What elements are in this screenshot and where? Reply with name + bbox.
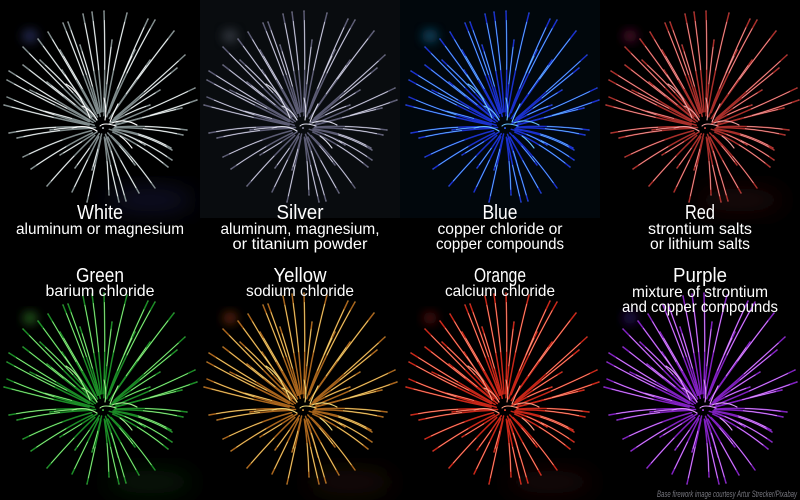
heading: White: White bbox=[77, 202, 123, 224]
text: red compound: or lithium salts bbox=[650, 236, 750, 253]
panel: Silver bbox=[200, 0, 400, 253]
panel: Green bbox=[4, 265, 197, 494]
panel: Orange bbox=[406, 265, 599, 494]
text: purple compound: and copper compounds bbox=[622, 299, 778, 316]
heading: Purple: Purple bbox=[673, 265, 727, 287]
panel: White bbox=[4, 11, 197, 238]
text: yellow compound: sodium chloride bbox=[246, 283, 354, 300]
heading: Silver: Silver bbox=[276, 202, 324, 224]
text: blue compound: copper chloride or bbox=[438, 221, 563, 238]
text: blue compound bbox=[436, 221, 564, 253]
text: purple compound bbox=[622, 284, 778, 316]
heading: Orange: Orange bbox=[474, 265, 526, 287]
icon: white firework bbox=[4, 11, 197, 202]
icon: orange firework bbox=[406, 293, 599, 484]
heading: Red: Red bbox=[685, 202, 715, 224]
heading: Green: Green bbox=[76, 265, 124, 287]
panel: Purple bbox=[604, 265, 797, 484]
text: red compound bbox=[648, 221, 752, 253]
icon: green firework bbox=[4, 293, 197, 484]
panel: Red bbox=[606, 11, 799, 253]
heading: Blue: Blue bbox=[482, 202, 518, 224]
text: silver compound bbox=[220, 221, 380, 253]
icon: purple firework bbox=[604, 293, 797, 484]
icon: blue firework bbox=[406, 11, 599, 202]
text: blue compound: copper compounds bbox=[436, 236, 564, 253]
panel: Blue bbox=[400, 0, 600, 253]
text: red compound: strontium salts bbox=[648, 221, 752, 238]
text: green compound: barium chloride bbox=[46, 283, 155, 300]
text: white compound: aluminum or magnesium bbox=[16, 221, 184, 238]
text: silver compound: aluminum, magnesium, bbox=[220, 221, 380, 238]
text: purple compound: mixture of strontium bbox=[632, 284, 768, 301]
icon: yellow firework bbox=[204, 293, 397, 484]
text: silver compound: or titanium powder bbox=[232, 236, 368, 253]
icon: red firework bbox=[606, 11, 799, 202]
heading: Yellow: Yellow bbox=[274, 265, 327, 287]
panel: Yellow bbox=[204, 265, 397, 494]
icon: silver firework bbox=[204, 11, 397, 202]
text: orange compound: calcium chloride bbox=[445, 283, 555, 300]
